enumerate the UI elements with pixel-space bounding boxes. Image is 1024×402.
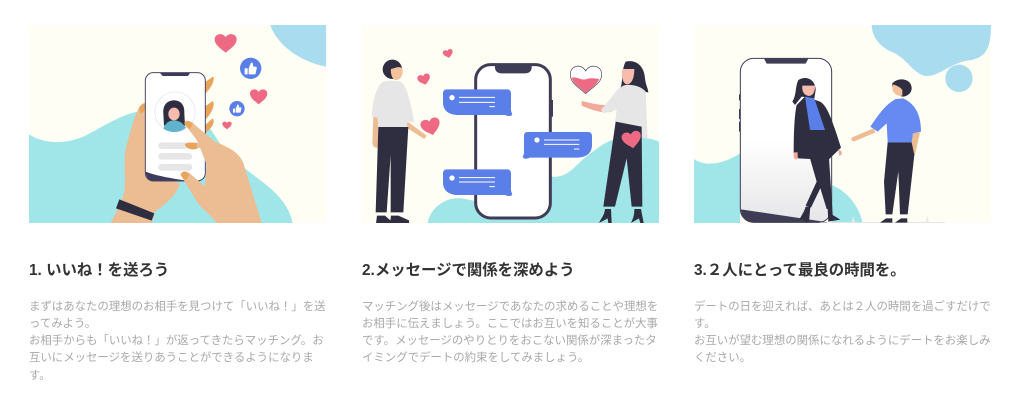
text: step 3 description: ください。 [694, 352, 751, 364]
illustrations [29, 25, 991, 223]
step 1 text [29, 262, 326, 382]
icon: heart floating lower [417, 74, 430, 85]
icon: like button small [229, 101, 245, 116]
fingers behind phone [206, 76, 214, 133]
woman [792, 78, 842, 222]
blob: teal left [694, 153, 740, 223]
message bubble 2 [523, 132, 592, 159]
small plants [852, 216, 929, 222]
nails [181, 121, 197, 180]
panel: illustration 3 meeting couple [694, 24, 991, 223]
text: step 1 description: まずはあなたの理想のお相手を見つけて「いいね！」を送 [29, 300, 326, 312]
icon: like button large [240, 58, 261, 79]
wrist band [116, 199, 154, 221]
text: step 2 description: イミングでデートの約束をしてみましょう。 [362, 352, 589, 364]
text: step 2 description: マッチング後はメッセージであなたの求めることや理想を [362, 300, 658, 312]
heading: step 2: 2.メッセージで関係を深めよう [362, 262, 575, 279]
heading: step 3: 3.２人にとって最良の時間を。 [694, 262, 906, 279]
ground line [832, 222, 945, 223]
text: step 3 description: す。 [694, 318, 716, 330]
profile avatar [155, 92, 195, 132]
text: step 3 description [694, 300, 991, 364]
text: step 2 description: お相手に伝えましょう。ここではお互いを知ることが大事 [362, 318, 658, 330]
man [372, 60, 427, 223]
text: step 1 description: 互いにメッセージを送りあうことができるようになりま [29, 352, 314, 364]
icon: heart floating upper [442, 49, 453, 58]
thumb nail [139, 103, 146, 113]
icon: half filled heart [570, 66, 602, 94]
profile text lines [158, 142, 192, 171]
text: step 3 description: お互いが望む理想の関係になれるようにデートをお楽しみ [694, 335, 991, 347]
blob: teal right [832, 185, 863, 223]
blob: top right blue [270, 24, 326, 67]
blob: teal wave [29, 112, 293, 223]
man [851, 79, 921, 223]
blob: teal [428, 138, 659, 223]
text: step 1 description: ってみよう。 [29, 318, 96, 330]
text: step 2 description [362, 300, 658, 364]
text: step 1 description: お相手からも「いいね！」が返ってきたらマッチング。お [29, 335, 324, 347]
text: step 1 description [29, 300, 326, 382]
icon: heart medium [250, 89, 267, 104]
text: step 1 description: す。 [29, 370, 51, 382]
icon: heart large [215, 34, 237, 53]
right hand [181, 121, 262, 223]
phone [476, 65, 553, 218]
panel: illustration 2 messaging couple [362, 25, 659, 223]
woman [582, 61, 648, 223]
icon: heart at woman's hip [622, 130, 641, 148]
step 2 text [362, 262, 658, 364]
panel: illustration 1 hand sending likes [29, 24, 326, 223]
heading: step 1: 1. いいね！を送ろう [29, 262, 169, 279]
left hand [111, 105, 180, 223]
phone [145, 73, 205, 181]
phone [739, 58, 832, 222]
blob: blue circle [945, 65, 973, 92]
message bubble 3 [443, 169, 512, 196]
icon: heart small [222, 122, 232, 129]
icon: heart held by man [420, 118, 440, 135]
message bubble 1 [443, 89, 512, 116]
text: step 3 description: デートの日を迎えれば、あとは２人の時間を過ごすだけで [694, 300, 991, 312]
step 3 text [694, 262, 991, 364]
blob: blue top [872, 24, 991, 76]
text: step 2 description: です。メッセージのやりとりをおこない関係が深まったタ [362, 335, 657, 347]
